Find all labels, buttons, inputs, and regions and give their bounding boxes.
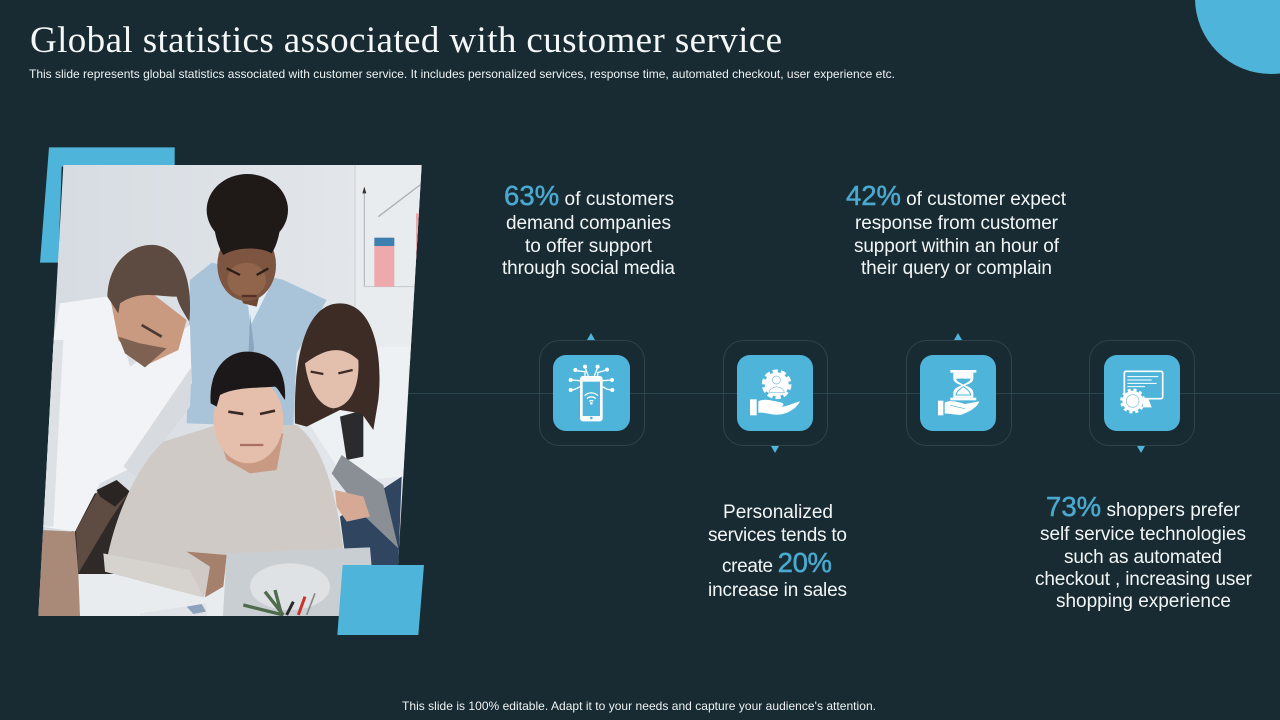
man left: shirt bbox=[42, 296, 192, 532]
photo: team around a laptop bbox=[30, 160, 430, 620]
stat: 73% self service: checkout , increasing user bbox=[1035, 569, 1253, 590]
stat: 73% self service bbox=[1035, 491, 1253, 612]
stat: personalized services 20% bbox=[708, 502, 847, 601]
woman top: shirt bbox=[187, 263, 327, 427]
stat: 63% social media support: to offer support bbox=[525, 236, 653, 257]
stat: personalized services 20%: Personalized bbox=[723, 502, 833, 523]
stat: personalized services 20%: increase in sales bbox=[708, 580, 847, 601]
woman top: neck and face bbox=[218, 253, 259, 307]
man front: hand bbox=[187, 552, 227, 597]
man front: neck and face bbox=[220, 433, 283, 473]
icon: monitor and gear bbox=[1121, 371, 1163, 412]
timeline connector line bbox=[408, 392, 1280, 394]
subtitle: This slide represents global statistics associated with customer service. It includes personalized services, response time, automated checkout, user experience etc. bbox=[29, 67, 895, 81]
stat: 42% expect response within an hour: support within an hour of bbox=[854, 236, 1060, 257]
accent: top-left blue shape bbox=[40, 147, 175, 263]
stat: 63% social media support: through social media bbox=[502, 258, 675, 279]
woman right: shirt bbox=[310, 365, 409, 479]
woman top: hair bbox=[206, 174, 288, 232]
node 3: hourglass bbox=[906, 333, 1012, 446]
icon: phone with network bbox=[569, 365, 614, 421]
title: Global statistics associated with customer service bbox=[30, 20, 782, 61]
stat: 73% self service: 73% shoppers prefer bbox=[1046, 491, 1241, 522]
stat: 42% expect response within an hour: response from customer bbox=[855, 213, 1059, 234]
man left: face bbox=[111, 295, 187, 367]
woman right: jeans bbox=[340, 477, 402, 567]
stat: 63% social media support: demand companies bbox=[506, 213, 671, 234]
stat: 63% social media support: 63% of customers bbox=[504, 180, 674, 211]
stat: 73% self service: self service technologies bbox=[1040, 524, 1246, 545]
woman right: tablet and hand bbox=[332, 455, 398, 548]
man front: sweater bbox=[105, 425, 343, 597]
stat: 73% self service: such as automated bbox=[1064, 547, 1222, 568]
stat: 42% expect response within an hour: their query or complain bbox=[861, 258, 1052, 279]
node 2: personalized service bbox=[724, 340, 828, 453]
photo block with accents bbox=[30, 147, 430, 635]
icon: hand holding gear with person bbox=[750, 371, 800, 415]
node 4: monitor with gear bbox=[1090, 340, 1194, 453]
man left: hair bbox=[107, 245, 190, 322]
stat: 42% expect response within an hour: 42% of customer expect bbox=[846, 180, 1067, 211]
icon: hand holding hourglass bbox=[938, 370, 979, 415]
footer note: This slide is 100% editable. Adapt it to your needs and capture your audience's attention. bbox=[402, 699, 876, 713]
woman right: face and hair bbox=[295, 303, 380, 430]
stat: 63% social media support bbox=[502, 180, 675, 279]
lower left dark area and table bbox=[72, 493, 128, 574]
node 1: smartphone bbox=[540, 333, 644, 446]
man front: hair bbox=[210, 352, 285, 407]
man left: forearm and watch bbox=[38, 530, 80, 617]
laptop bbox=[223, 547, 372, 620]
stat: 73% self service: shopping experience bbox=[1056, 591, 1231, 612]
stat: 42% expect response within an hour bbox=[846, 180, 1067, 279]
plant and pens bbox=[243, 590, 283, 615]
decorative corner circle bbox=[1195, 0, 1280, 74]
stat: personalized services 20%: services tends to bbox=[708, 525, 847, 546]
stat: personalized services 20%: create 20% bbox=[722, 547, 832, 578]
accent: bottom-right blue shape bbox=[337, 565, 424, 635]
